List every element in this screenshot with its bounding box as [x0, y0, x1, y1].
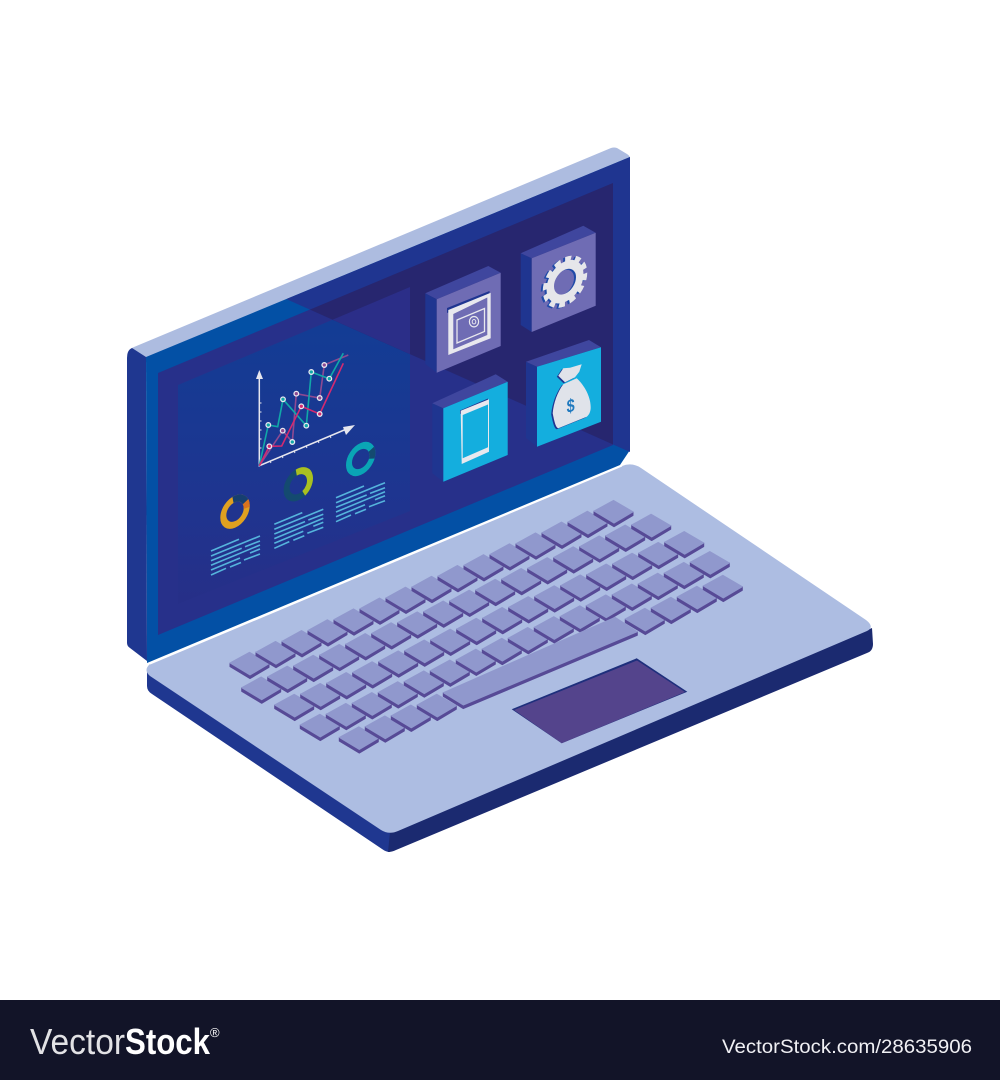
key row 4 — [300, 552, 729, 741]
donut chart: teal — [345, 436, 376, 482]
chart nodes — [266, 363, 332, 449]
base top face — [146, 464, 871, 833]
laptop screen lid — [127, 148, 630, 663]
footer bar — [0, 1000, 1000, 1080]
base right side — [388, 628, 873, 852]
tile: safe icon — [425, 266, 501, 373]
screen reflection — [286, 157, 630, 452]
lid top edge — [130, 148, 630, 358]
chart axes — [256, 370, 355, 466]
donut chart: green — [285, 464, 312, 505]
trackpad — [512, 658, 687, 743]
tile: gear icon — [521, 226, 596, 332]
dollar sign: $ — [567, 394, 575, 417]
text lines block 3 — [336, 483, 385, 522]
key row 3 — [275, 532, 704, 721]
donut chart: orange — [219, 488, 251, 536]
tile: phone icon — [432, 374, 508, 482]
brand logo text: Vector — [30, 1021, 125, 1062]
laptop base — [146, 464, 873, 852]
key row 5 with spacebar — [339, 575, 742, 753]
brand logo text: Stock — [125, 1021, 211, 1062]
lid left side — [127, 348, 147, 661]
purple series — [259, 355, 348, 466]
pink series — [259, 363, 343, 466]
text lines block 1 — [211, 536, 260, 575]
teal series — [259, 353, 343, 466]
base left side — [147, 668, 390, 852]
screen panel — [178, 287, 410, 604]
line chart — [256, 353, 355, 466]
laptop illustration — [127, 148, 873, 852]
key row 2 — [242, 514, 671, 703]
text lines block 2 — [274, 509, 323, 548]
spacebar — [443, 617, 637, 709]
image id text: VectorStock.com/28635906 — [722, 1037, 972, 1058]
keyboard — [230, 500, 742, 753]
inner frame — [158, 183, 613, 635]
registered mark: ® — [210, 1025, 220, 1040]
key row 1 — [230, 500, 633, 679]
tile: money bag icon — [526, 340, 601, 447]
screen bezel — [146, 157, 630, 663]
